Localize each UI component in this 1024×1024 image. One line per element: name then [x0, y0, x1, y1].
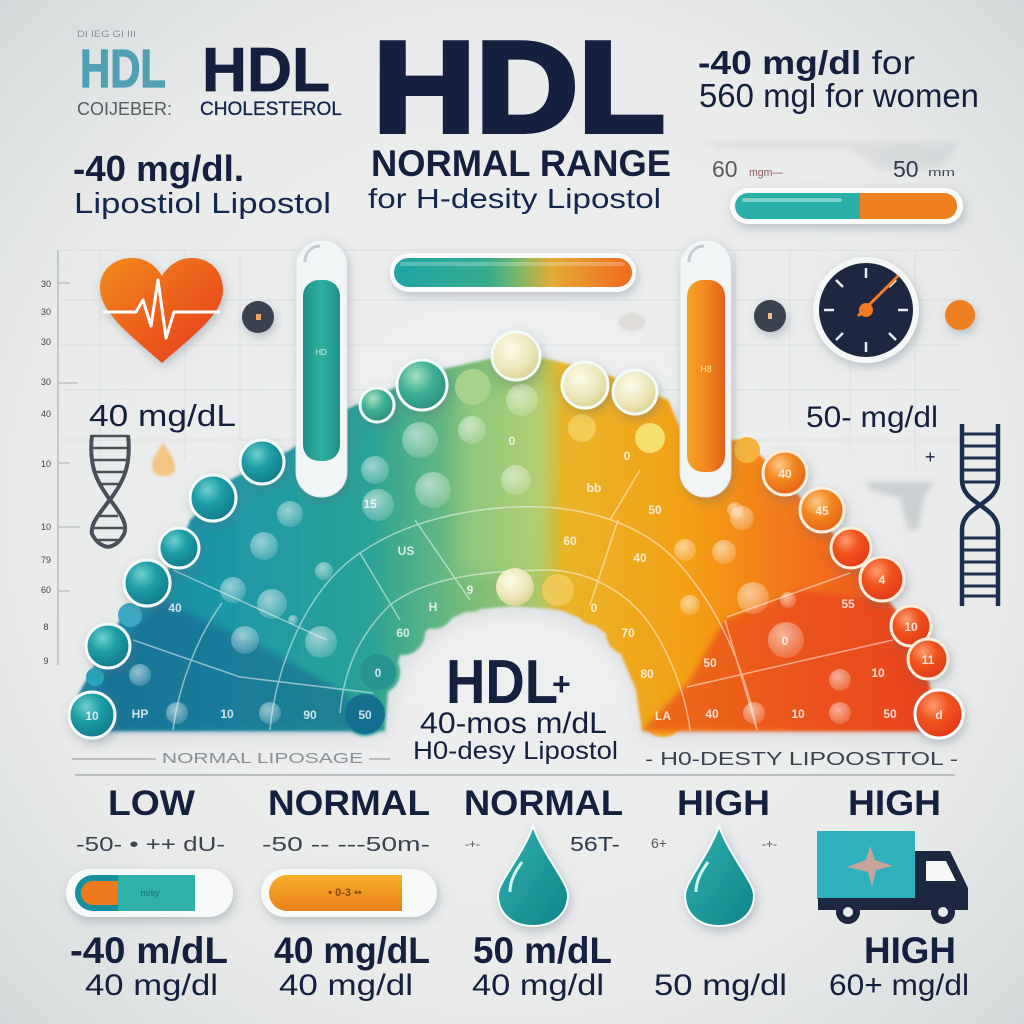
top-right range bar: mgm—: [749, 167, 783, 179]
icon: truck: [817, 831, 968, 924]
icon: capsule normal: • 0-3 ••: [328, 887, 362, 899]
column: normal 2: -+-: [465, 837, 480, 851]
bead and cell labels: 40: [705, 707, 719, 721]
column: normal 1: -50 -- ---50m-: [262, 834, 430, 856]
top-left teal logo: COIJEBER:: [77, 99, 172, 119]
blurred capsule mark: [618, 313, 646, 331]
center HDL+ label: +: [552, 666, 571, 702]
bead and cell labels: 50: [358, 708, 372, 722]
bead and cell labels: 60: [563, 534, 577, 548]
icon: DNA left: [91, 435, 129, 547]
bead and cell labels: US: [398, 544, 414, 558]
HDL cholesterol label: CHOLESTEROL: [200, 99, 342, 120]
top-left teal logo: HDL: [80, 39, 166, 99]
column: high 1: -+-: [762, 837, 777, 851]
column: high 1: HIGH: [677, 784, 770, 823]
column: high 1: 50 mg/dl: [654, 969, 787, 1002]
column: normal 2: [464, 784, 623, 1002]
icon: heart with pulse: [100, 258, 223, 363]
bead and cell labels: 10: [791, 707, 805, 721]
column: low: 40 mg/dl: [85, 969, 218, 1002]
icon: capsule normal: [261, 869, 437, 917]
axis with ticks: 30: [41, 377, 51, 387]
chart: HDL range fan: [69, 332, 963, 738]
bead and cell labels: LA: [655, 709, 671, 723]
axis with ticks: 30: [41, 307, 51, 317]
bead and cell labels: d: [935, 708, 943, 722]
smudge and plus: +: [925, 447, 936, 467]
icon: DNA right: [962, 424, 998, 606]
icon: drop: [498, 826, 568, 926]
orange dot: [945, 300, 975, 330]
bead and cell labels: 50: [703, 656, 717, 670]
bead and cell labels: 10: [220, 707, 234, 721]
fan shadow: [92, 350, 938, 738]
bead and cell labels: 90: [303, 708, 317, 722]
icon: capsule low: [66, 869, 233, 917]
column: high 2: HIGH: [864, 930, 956, 971]
middle gradient bar: [390, 253, 636, 292]
bead and cell labels: 0: [591, 601, 598, 615]
top-right range bar: [702, 142, 963, 224]
column: high 1: [651, 784, 787, 1002]
bead and cell labels: 10: [85, 709, 99, 723]
bead and cell labels: 45: [815, 504, 829, 518]
bead and cell labels: 80: [640, 667, 654, 681]
bead and cell labels: 40: [168, 601, 182, 615]
top-right range bar: mm: [928, 167, 955, 179]
caption left: ———— NORMAL LIPOSAGE —: [72, 750, 390, 767]
axis with ticks: [41, 250, 80, 666]
right range text: [698, 44, 979, 114]
dot marker right: [754, 300, 786, 332]
bead and cell labels: 50: [883, 707, 897, 721]
title: NORMAL RANGE: [371, 143, 671, 184]
icon: drop: [685, 826, 754, 926]
column: normal 1: 40 mg/dl: [279, 969, 413, 1002]
bead and cell labels: 10: [871, 666, 885, 680]
bead and cell labels: 55: [841, 597, 855, 611]
title: [368, 16, 671, 214]
axis with ticks: 60: [41, 585, 51, 595]
bead and cell labels: 4: [879, 573, 886, 587]
axis with ticks: 79: [41, 555, 51, 565]
test tube right: [680, 240, 731, 497]
column: low: [66, 784, 233, 1002]
left range text: Lipostiol Lipostol: [74, 188, 331, 220]
top-left teal logo: [77, 29, 172, 119]
center HDL+ label: H0-desy Lipostol: [413, 737, 618, 765]
caption right: - H0-DESTY LIPOOSTTOL -: [645, 749, 958, 769]
title: for H-desity Lipostol: [368, 183, 661, 214]
faint orange drop: [152, 442, 175, 476]
test tube right: H8: [700, 364, 712, 374]
top-right range bar: 50: [893, 156, 919, 182]
top-right range bar: 60: [712, 156, 738, 182]
center HDL+ label: [413, 648, 618, 765]
fan segment lines: [133, 470, 893, 730]
column: normal 1: [261, 784, 437, 1002]
axis with ticks: 9: [43, 656, 49, 666]
axis with ticks: 10: [41, 522, 51, 532]
beads inside fan: [129, 384, 851, 724]
HDL cholesterol label: HDL: [202, 36, 330, 105]
axis with ticks: 30: [41, 279, 51, 289]
bead and cell labels: HP: [132, 707, 148, 721]
column: high 2: [817, 784, 969, 1002]
bead and cell labels: 50: [648, 503, 662, 517]
left range text: -40 mg/dl.: [73, 148, 244, 189]
label: 50 mg/dl: 50- mg/dl: [806, 401, 938, 434]
center HDL+ label: 40-mos m/dL: [420, 707, 607, 740]
column: normal 2: 50 m/dL: [473, 930, 612, 971]
axis with ticks: 40: [41, 409, 51, 419]
bead and cell labels: 70: [621, 626, 635, 640]
bead and cell labels: 60: [396, 626, 410, 640]
axis with ticks: 8: [43, 622, 49, 632]
column: low: -50- • ++ dU-: [76, 834, 225, 856]
bead and cell labels: H: [429, 600, 437, 614]
test tube left: [296, 240, 347, 497]
ringed beads: [69, 332, 963, 738]
right range text: -40 mg/dl for: [698, 44, 915, 81]
column: normal 2: 40 mg/dl: [472, 969, 604, 1002]
axis with ticks: 10: [41, 459, 51, 469]
bead and cell labels: 9: [467, 583, 474, 597]
column: high 2: HIGH: [848, 784, 941, 823]
title: HDL: [373, 16, 665, 160]
icon: gauge: [813, 257, 919, 363]
column: normal 2: NORMAL: [464, 784, 623, 823]
bead and cell labels: bb: [587, 481, 601, 495]
dot marker left: [242, 301, 274, 333]
bead and cell labels: [85, 434, 943, 723]
top-left teal logo: DI IEG GI III: [77, 29, 136, 39]
column: low: -40 m/dL: [70, 930, 228, 971]
smudge and plus: [865, 447, 936, 530]
bead and cell labels: 0: [509, 434, 516, 448]
bead and cell labels: 10: [904, 620, 918, 634]
column: normal 1: NORMAL: [268, 784, 430, 823]
axis with ticks: 30: [41, 337, 51, 347]
label: 40 mg/dL: 40 mg/dL: [89, 398, 236, 433]
column: normal 1: 40 mg/dL: [274, 930, 430, 971]
bead and cell labels: 0: [375, 666, 382, 680]
column: normal 2: 56T-: [570, 834, 620, 856]
left range text: [73, 148, 331, 220]
icon: capsule low: m/sy: [140, 888, 160, 898]
bead and cell labels: 15: [363, 497, 377, 511]
column: high 2: 60+ mg/dl: [829, 969, 969, 1002]
bead and cell labels: 40: [633, 551, 647, 565]
test tube left: HD: [315, 348, 327, 357]
bead and cell labels: 0: [624, 449, 631, 463]
bead and cell labels: 11: [922, 653, 935, 667]
center HDL+ label: HDL: [446, 648, 558, 717]
right range text: 560 mgl for women: [699, 77, 979, 114]
column: low: LOW: [108, 784, 195, 823]
bead and cell labels: 0: [782, 634, 789, 648]
bead and cell labels: 40: [778, 467, 792, 481]
column: high 1: 6+: [651, 835, 667, 851]
